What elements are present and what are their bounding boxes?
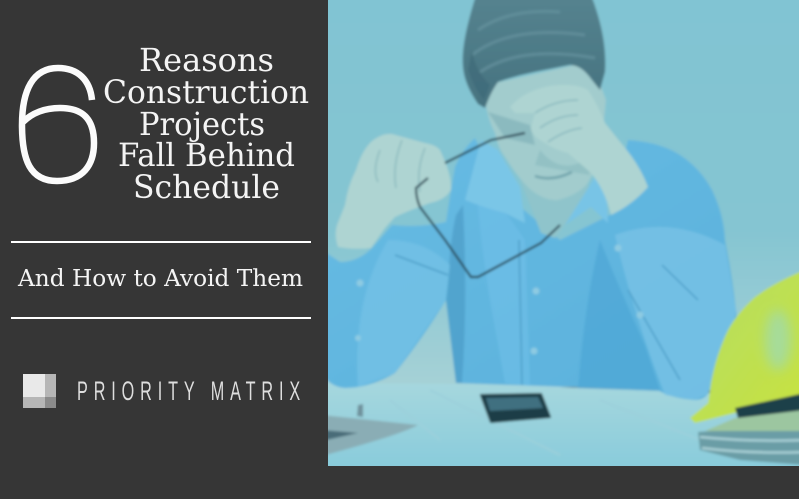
shadow under brow and mouth bbox=[488, 112, 535, 145]
stack of papers bbox=[697, 430, 799, 466]
title text: Schedule bbox=[133, 168, 280, 206]
collar bbox=[465, 140, 525, 223]
title text: Projects bbox=[139, 105, 265, 143]
man's shirt bbox=[322, 138, 736, 400]
left panel background bbox=[0, 0, 328, 499]
logo mark bbox=[23, 374, 56, 408]
subtitle: And How to Avoid Them bbox=[17, 266, 303, 292]
title text: Reasons bbox=[139, 41, 274, 79]
logo wordmark: PRIORITY MATRIX bbox=[77, 376, 300, 406]
neck bbox=[524, 184, 588, 239]
title text: Construction bbox=[103, 73, 309, 111]
hard hat brim bbox=[735, 393, 799, 418]
title numeral 6 bbox=[22, 68, 94, 181]
shirt buttons bbox=[355, 244, 644, 354]
wall background bbox=[320, 0, 799, 387]
face bbox=[485, 65, 606, 200]
phone bbox=[481, 394, 550, 422]
hair bbox=[463, 0, 605, 108]
hard hat highlight bbox=[765, 310, 791, 370]
raised left fist bbox=[336, 134, 451, 249]
photo: stressed man at a desk with blue overlay bbox=[320, 0, 799, 470]
shirt shading bbox=[446, 205, 465, 383]
blueprint lines on desk bbox=[390, 390, 700, 455]
divider top bbox=[11, 241, 311, 243]
title text: Fall Behind bbox=[118, 136, 295, 174]
hand on brow and forearm bbox=[510, 85, 648, 215]
eyeglasses bbox=[416, 133, 560, 277]
yellow hard hat bbox=[690, 270, 799, 423]
desk surface bbox=[320, 383, 799, 470]
divider bottom bbox=[11, 317, 311, 319]
title text bbox=[103, 41, 309, 206]
laptop bbox=[322, 415, 418, 456]
